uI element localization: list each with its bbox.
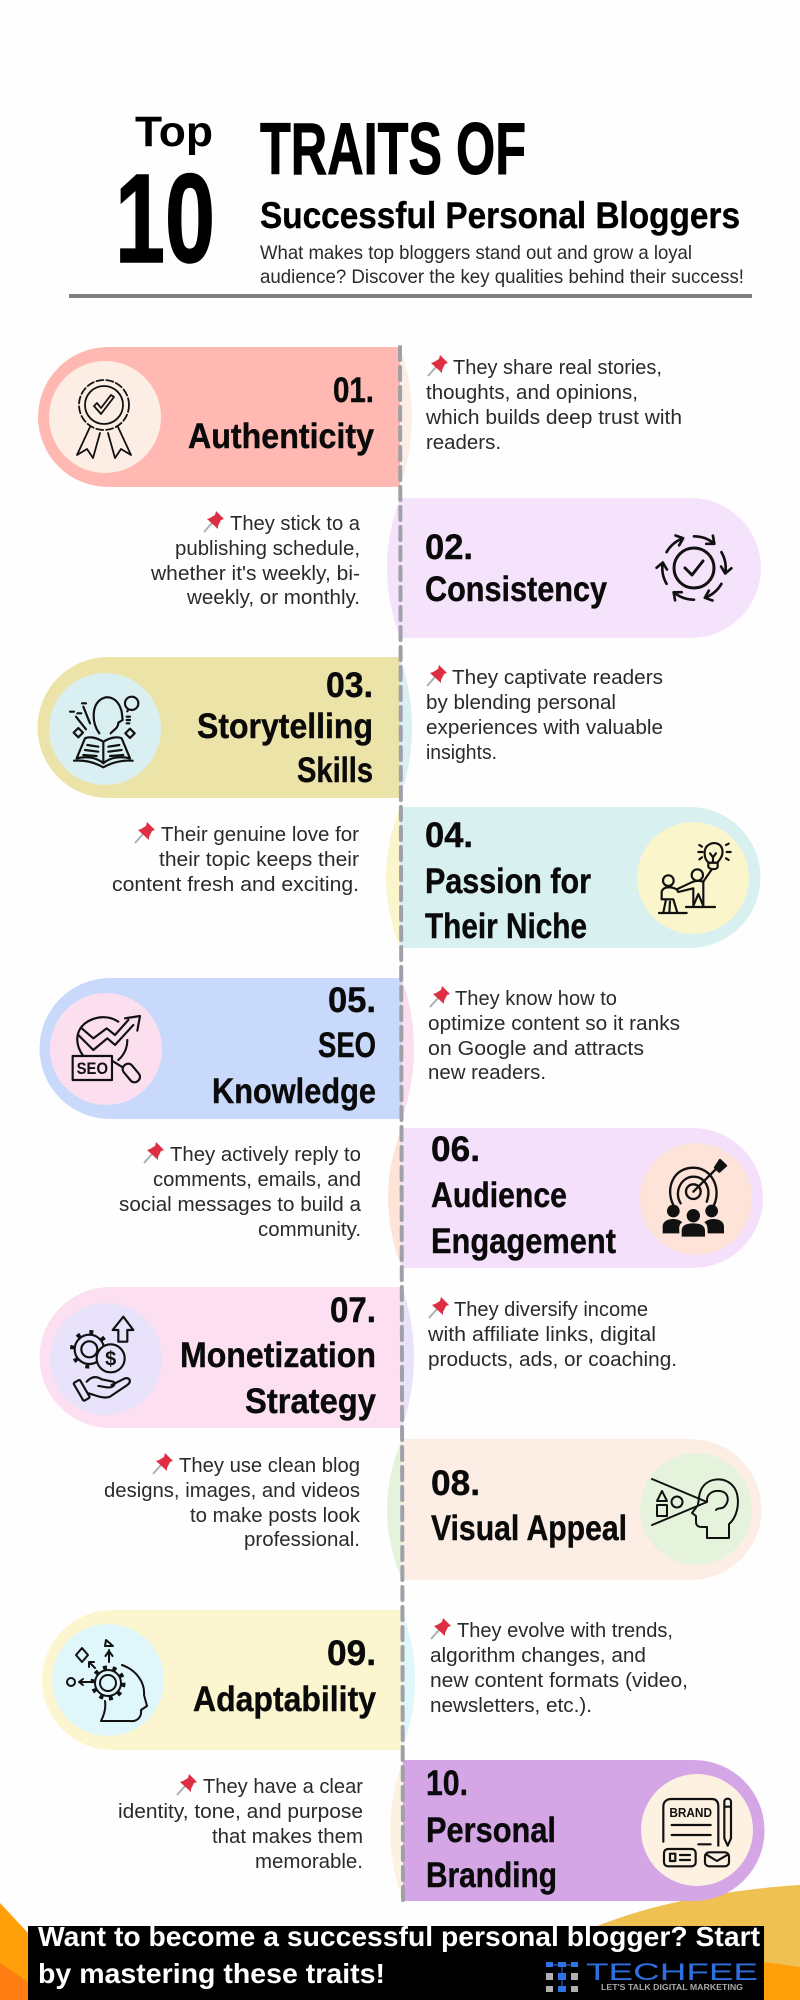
heading 07: Monetization [180,1336,376,1375]
heading 06: Engagement [431,1222,616,1261]
heading 05 [212,981,376,1111]
panel: 10 Personal Branding [118,1760,764,1901]
panel: 07 Monetization Strategy [40,1287,677,1428]
heading 06 [431,1130,616,1261]
heading 05: 05. [328,981,376,1020]
icon: SEO magnifier [73,1016,142,1084]
heading 09: Adaptability [193,1680,376,1719]
title: Traits of: TRAITS OF [260,109,526,190]
heading 10 [426,1764,557,1895]
heading 05: SEO [318,1026,376,1065]
pill background 02 [387,498,761,638]
description 05: new readers. [428,1062,546,1084]
panel: 05 SEO Knowledge [40,978,680,1119]
title: Top: Top [135,108,213,156]
description 10: memorable. [255,1851,363,1873]
heading 01: Authenticity [188,417,374,456]
description 06: social messages to build a [119,1194,362,1216]
footer call to action [38,1921,760,1989]
heading 03: Storytelling [197,707,373,746]
pill background 08 [387,1439,762,1580]
heading 03: Skills [297,751,373,790]
description 02: weekly, or monthly. [186,587,360,609]
heading 10: Personal [426,1811,556,1850]
footer call to action: Want to become a successful personal blogger? Start [38,1921,760,1952]
heading 09 [193,1634,376,1719]
description 10 [118,1774,363,1873]
description 04: Their genuine love for [161,824,359,846]
heading 07: Strategy [245,1382,376,1421]
title: Successful Personal Bloggers: Successful Personal Bloggers [260,195,740,236]
logo mark [546,1962,578,1992]
description 07: They diversify income [454,1299,648,1321]
panel: 03 Storytelling Skills [37,657,663,798]
icon: gear coin and hand [72,1317,133,1401]
heading 03 [197,666,373,790]
subtitle: What makes top bloggers stand out and grow a loyal [260,242,692,264]
pill background 06 [388,1128,763,1268]
icon: cycle with check [656,534,732,602]
heading 01 [188,371,374,456]
title divider [69,294,752,298]
heading 07 [180,1291,376,1421]
title: 10: 10 [115,148,215,289]
description 06 [119,1142,362,1241]
description 08 [104,1453,361,1551]
description 10: They have a clear [203,1776,363,1798]
footer call to action: by mastering these traits! [38,1958,385,1989]
panel: 09 Adaptability [42,1610,688,1750]
heading 03: 03. [326,666,373,705]
description 03: They captivate readers [452,667,663,689]
logo tagline: LET'S TALK DIGITAL MARKETING [601,1983,743,1992]
description 06: They actively reply to [170,1144,361,1166]
heading 04 [425,816,591,946]
panel: 06 Audience Engagement [119,1128,763,1268]
heading 06: 06. [431,1130,480,1169]
subtitle: audience? Discover the key qualities behind their success! [260,266,744,288]
icon: head with gear [67,1640,147,1721]
description 04: content fresh and exciting. [112,874,359,896]
description 01: thoughts, and opinions, [426,382,638,404]
pill background 04 [386,807,760,948]
footer banner [28,1921,764,2000]
heading 06: Audience [431,1176,567,1215]
description 07: products, ads, or coaching. [428,1349,677,1371]
footer background [28,1926,764,2000]
description 08: designs, images, and videos [104,1480,360,1502]
description 09: newsletters, etc.). [430,1695,592,1717]
pill background 01 [38,347,412,487]
description 01: readers. [426,432,501,454]
description 08: professional. [244,1529,360,1551]
heading 10: 10. [426,1764,468,1803]
logo wordmark: TECHFEE [586,1959,758,1986]
heading 07: 07. [330,1291,376,1330]
description 09: algorithm changes, and [430,1645,646,1667]
logo: Techfee [546,1959,758,1992]
description 03: by blending personal [426,692,616,714]
heading 02: 02. [425,528,473,567]
heading 01: 01. [333,371,374,410]
subtitle [260,242,744,288]
description 08: to make posts look [190,1505,361,1527]
icon: head with shapes [652,1479,738,1538]
description 08: They use clean blog [179,1455,360,1477]
description 05: They know how to [455,988,617,1010]
icon: brand document [663,1799,731,1866]
dashed center timeline [400,347,403,1901]
heading 10: Branding [426,1856,557,1895]
description 05 [428,986,680,1084]
heading 04: Their Niche [425,907,587,946]
heading 08: Visual Appeal [431,1509,627,1548]
heading 02 [425,528,607,609]
description 01 [425,355,682,454]
panel: 02 Consistency [150,498,761,638]
pill background 10 [390,1760,764,1901]
background shape: bottom right gold wave [597,1885,800,2000]
icon: gear coin and hand: $ [105,1349,116,1371]
heading 04: 04. [425,816,473,855]
pill background 09 [42,1610,415,1750]
pill background 05 [40,978,414,1119]
description 02 [150,511,361,609]
description 05: optimize content so it ranks [428,1013,680,1035]
heading 09: 09. [327,1634,376,1673]
panel: 08 Visual Appeal [104,1439,762,1580]
description 09: They evolve with trends, [457,1620,673,1642]
heading 05: Knowledge [212,1072,376,1111]
description 03: insights. [426,742,497,764]
panel: 01 Authenticity [38,347,682,487]
description 09: new content formats (video, [430,1670,688,1692]
description 06: community. [258,1219,361,1241]
description 07: with affiliate links, digital [427,1324,656,1346]
heading 08 [431,1464,627,1548]
icon: brand document: BRAND [669,1805,712,1820]
panel: 04 Passion for Their Niche [112,807,760,948]
description 02: publishing schedule, [175,538,360,560]
pill background 07 [40,1287,414,1428]
description 07 [427,1297,677,1371]
description 04: their topic keeps their [159,849,359,871]
description 10: identity, tone, and purpose [118,1801,363,1823]
heading 04: Passion for [425,862,591,901]
description 09 [430,1618,688,1717]
description 03: experiences with valuable [426,717,663,739]
heading 02: Consistency [425,570,607,609]
description 02: whether it's weekly, bi- [150,563,360,585]
description 03 [426,665,663,764]
heading 08: 08. [431,1464,480,1503]
description 10: that makes them [212,1826,363,1848]
description 04 [112,822,359,896]
description 05: on Google and attracts [428,1038,644,1060]
description 06: comments, emails, and [153,1169,361,1191]
icon: award ribbon [77,380,131,458]
icon: SEO magnifier: SEO [77,1059,108,1078]
icon: target and audience [663,1160,726,1237]
description 02: They stick to a [230,513,361,535]
pill background 03 [37,657,412,798]
icon: people reaching lightbulb [659,843,731,913]
icon: book and head [70,697,138,767]
title block [115,108,744,289]
description 01: They share real stories, [453,357,662,379]
background shape: bottom left orange corner [0,1903,28,2000]
description 01: which builds deep trust with [425,407,682,429]
